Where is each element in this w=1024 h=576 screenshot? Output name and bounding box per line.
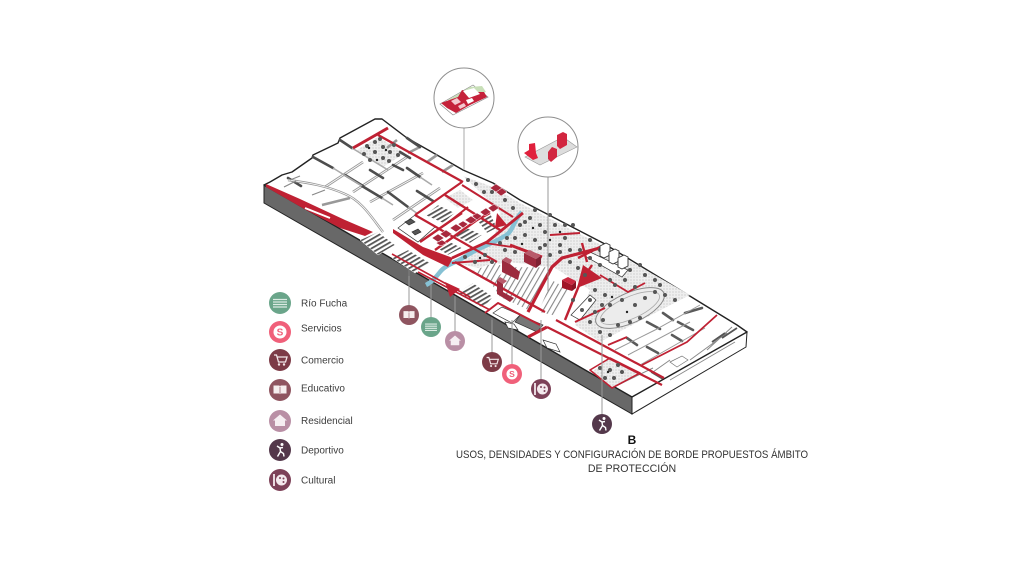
- red wedges and plazas: [266, 184, 602, 297]
- legend: Comercio: Comercio: [301, 356, 344, 366]
- legend: [269, 292, 353, 491]
- legend: Río Fucha: Río Fucha: [301, 298, 348, 310]
- trees: [364, 139, 675, 378]
- marker: servicios: [502, 364, 522, 384]
- legend: Cultural: [269, 469, 335, 491]
- legend: Educativo: [269, 379, 345, 401]
- legend: Río Fucha: [269, 292, 348, 314]
- running track: [590, 279, 670, 337]
- marker: deportivo: [592, 414, 612, 434]
- central white lots: [398, 215, 628, 352]
- inset circle 2: [518, 117, 578, 292]
- legend: Educativo: Educativo: [301, 384, 345, 394]
- legend: Servicios: [269, 321, 342, 343]
- caption title second line: DE PROTECCIÓN: [588, 462, 676, 475]
- marker: río: [421, 317, 441, 337]
- legend: Residencial: [269, 410, 353, 432]
- marker: residencial: [445, 331, 465, 351]
- legend: Comercio: [269, 349, 344, 371]
- dark red towers: [497, 250, 576, 302]
- marker: cultural: [531, 379, 551, 399]
- red road network: [353, 128, 717, 388]
- road grid east: [615, 305, 737, 385]
- legend: Deportivo: Deportivo: [301, 446, 344, 456]
- caption letter: B: [628, 433, 637, 447]
- hatched green zones: [357, 137, 690, 388]
- striped building blocks: [360, 205, 570, 316]
- block side face: [264, 185, 747, 414]
- map markers: [399, 305, 612, 434]
- leader lines: [409, 276, 602, 414]
- block top surface: [264, 119, 747, 397]
- legend: Residencial: Residencial: [301, 416, 353, 427]
- small trees accent: [369, 148, 627, 372]
- caption title: USOS, DENSIDADES Y CONFIGURACIÓN DE BORDE PROPUESTOS ÁMBITO: [456, 448, 808, 461]
- white towers: [600, 243, 628, 269]
- caption: [456, 433, 808, 475]
- isometric urban block model: [264, 119, 747, 414]
- legend: Deportivo: [269, 439, 344, 461]
- marker: comercio: [482, 352, 502, 372]
- legend: Servicios: Servicios: [301, 324, 342, 334]
- red building clusters: [432, 184, 507, 246]
- river: [426, 212, 522, 285]
- inset 1 model: [440, 85, 488, 115]
- inset circle 1: [434, 68, 494, 170]
- legend: Cultural: Cultural: [301, 476, 335, 486]
- road grid west: [284, 138, 453, 232]
- marker: educativo: [399, 305, 419, 325]
- inset 2 model: [524, 132, 577, 165]
